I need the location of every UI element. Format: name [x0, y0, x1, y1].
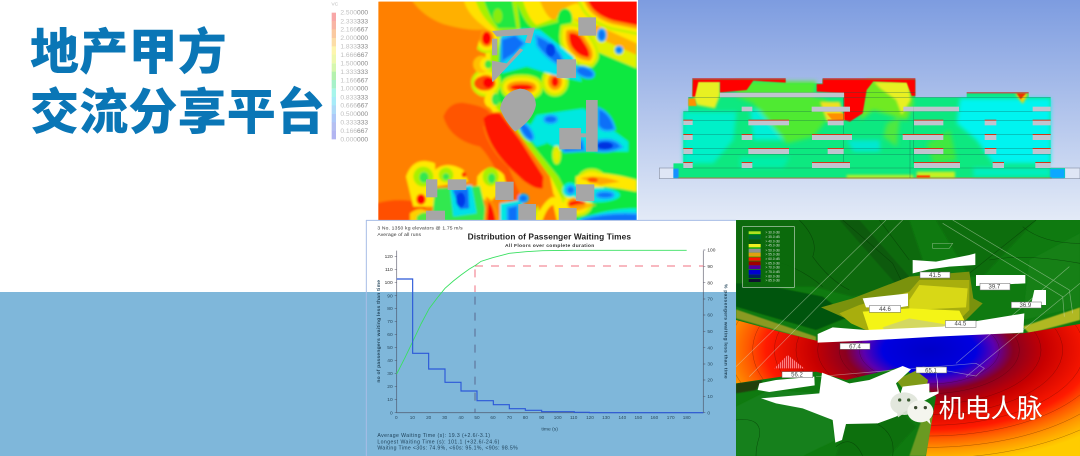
map legend: > 50.0 dB — [765, 248, 780, 252]
red hatched building — [774, 355, 804, 368]
noise value labels: 67.4 — [849, 344, 861, 350]
legend: velocity scale: 1.333333 — [340, 69, 368, 76]
map legend: > 40.0 dB — [765, 239, 780, 243]
terrain contour lines — [736, 220, 1080, 456]
right axis labels: 60 — [707, 313, 713, 319]
x axis labels: 10 — [410, 415, 415, 420]
legend: velocity scale: 0.500000 — [340, 111, 368, 118]
map legend: > 30.0 dB — [765, 231, 780, 235]
icon: wechat logo — [890, 392, 933, 425]
right axis labels: 50 — [707, 329, 713, 335]
section contour body — [659, 78, 1080, 179]
panel: building section heatmap — [659, 78, 1080, 179]
right axis labels: 40 — [707, 345, 713, 351]
chart frame — [366, 220, 736, 456]
upper warm wedge — [515, 0, 640, 47]
title — [30, 25, 325, 140]
noise value labels: 44.5 — [955, 322, 967, 328]
x axis labels: 140 — [618, 415, 627, 420]
map legend: > 85.0 dB — [765, 279, 780, 283]
map legend: > 35.0 dB — [765, 235, 780, 239]
x axis labels: 0 — [395, 415, 398, 420]
panel: wind velocity map — [331, 0, 640, 227]
left axis labels: 30 — [387, 371, 393, 377]
chart header text: Distribution of Passenger Waiting Times — [468, 231, 631, 241]
legend: velocity scale: 0.000000 — [340, 136, 368, 143]
map legend: > 60.0 dB — [765, 257, 780, 261]
left axis labels: 10 — [387, 397, 393, 403]
cumulative curve — [397, 250, 687, 374]
cold spots — [498, 26, 637, 220]
summary statistics: Longest Waiting Time (s): 101.1 (+32.6/-24.6) — [377, 439, 500, 445]
x axis labels: 100 — [554, 415, 562, 420]
summary statistics: Average Waiting Time (s): 19.3 (+2.6/-3.1) — [377, 433, 490, 439]
noise value labels: 44.6 — [879, 307, 891, 313]
watermark text: 机电人脉 — [939, 394, 1043, 424]
left axis labels: 80 — [387, 306, 393, 312]
axis titles: no of passengers waiting less than time — [376, 280, 382, 383]
noise value labels: 56.2 — [791, 373, 803, 379]
right flow field — [484, 52, 563, 202]
x axis labels: 30 — [442, 415, 448, 420]
left side repaint — [378, 2, 510, 220]
title: 交流分享平台 — [30, 85, 325, 140]
left axis labels: 60 — [387, 332, 393, 338]
noise value labels: 36.9 — [1020, 303, 1032, 309]
x axis labels: 170 — [667, 415, 675, 420]
x axis labels: 150 — [634, 415, 643, 420]
left axis labels: 40 — [387, 358, 393, 364]
left side spots — [482, 32, 491, 45]
blue band background — [0, 292, 740, 456]
bottom left rings — [406, 161, 437, 207]
axis titles — [376, 280, 729, 432]
x axis labels: 60 — [490, 415, 496, 420]
left axis labels — [385, 254, 393, 416]
x axis labels: 70 — [507, 415, 512, 420]
x axis labels: 50 — [474, 415, 480, 420]
map legend: > 45.0 dB — [765, 244, 780, 248]
title: 地产甲方 — [30, 25, 227, 80]
left axis labels: 50 — [387, 345, 393, 351]
base terrain green — [736, 220, 1080, 456]
right axis labels: 90 — [707, 264, 713, 270]
road linework — [736, 220, 1080, 377]
right axis labels: 30 — [707, 362, 713, 368]
map legend: > 75.0 dB — [765, 270, 780, 274]
right axis labels: 10 — [707, 394, 713, 400]
chart header text: Average of all runs — [377, 232, 421, 238]
map legend: > 65.0 dB — [765, 261, 780, 265]
x axis labels: 110 — [570, 415, 578, 420]
noise value labels — [782, 272, 1041, 379]
x axis labels: 130 — [602, 415, 610, 420]
map legend: > 80.0 dB — [765, 274, 780, 278]
road edge bands — [736, 307, 1080, 456]
x axis labels: 180 — [683, 415, 691, 420]
right axis labels: 20 — [707, 378, 713, 384]
chart background — [366, 220, 736, 292]
waiting time histogram steps — [397, 279, 703, 413]
legend: velocity scale: 2.166667 — [340, 27, 368, 34]
chart header text — [377, 226, 631, 249]
x axis labels — [395, 415, 691, 420]
legend: velocity scale: 2.500000 — [340, 10, 368, 17]
right axis labels: 0 — [707, 410, 710, 416]
chart header text: 3 No. 1350 kg elevators @ 1.75 m/s — [377, 226, 463, 232]
white building footprints — [758, 253, 1046, 443]
left axis labels: 90 — [387, 293, 393, 299]
central noise contours — [736, 320, 1080, 456]
legend: velocity scale — [331, 2, 368, 143]
chart header text: All Floors over complete duration — [505, 243, 594, 249]
legend: velocity scale: 0.833333 — [340, 94, 368, 101]
right axis labels — [707, 248, 716, 416]
legend: velocity scale: 1.000000 — [340, 86, 368, 93]
x axis labels: 90 — [539, 415, 545, 420]
noise value labels: 41.5 — [929, 273, 941, 279]
bottom warm streaks — [576, 173, 637, 192]
axis titles: % passengers waiting less than time — [723, 284, 729, 379]
target dashed line: 90 percent — [475, 266, 703, 413]
legend: velocity scale: 0.166667 — [340, 128, 368, 135]
legend: velocity scale: VC — [331, 2, 339, 8]
right axis labels: 100 — [707, 248, 716, 254]
legend: velocity scale: 2.333333 — [340, 18, 368, 25]
axis titles: time (s) — [541, 426, 558, 432]
panel: passenger waiting time chart — [366, 220, 736, 456]
x axis labels: 40 — [458, 415, 464, 420]
legend: velocity scale: 0.333333 — [340, 120, 368, 127]
left axis labels: 100 — [385, 280, 393, 286]
left axis labels: 120 — [385, 254, 393, 260]
floor slabs and openings — [683, 93, 1051, 178]
chart axes and ticks — [395, 250, 705, 413]
heatmap contours — [377, 0, 640, 227]
summary statistics — [377, 433, 518, 452]
legend: velocity scale: 0.666667 — [340, 103, 368, 110]
cold flow band — [502, 28, 582, 82]
panel: sky background for building section — [638, 0, 1080, 222]
x axis labels: 160 — [650, 415, 659, 420]
x axis labels: 20 — [426, 415, 432, 420]
noise value labels: 65.1 — [925, 368, 937, 374]
x axis labels: 80 — [523, 415, 528, 420]
right axis labels: 80 — [707, 280, 713, 286]
map legend: > 70.0 dB — [765, 266, 780, 270]
panel: noise contour site map — [706, 220, 1080, 456]
map legend — [743, 227, 794, 287]
right axis labels: 70 — [707, 297, 713, 303]
quiet side yellow contours — [821, 272, 983, 390]
left axis labels: 0 — [390, 410, 393, 416]
legend: velocity scale: 1.833333 — [340, 44, 368, 51]
legend: velocity scale: 1.166667 — [340, 77, 368, 84]
left axis labels: 110 — [385, 267, 393, 273]
summary statistics: Waiting Time <30s: 74.9%, <60s: 95.1%, <90s: 98.5% — [377, 446, 518, 452]
map legend: > 55.0 dB — [765, 253, 780, 257]
legend: velocity scale: 1.666667 — [340, 52, 368, 59]
left axis labels: 20 — [387, 384, 393, 390]
grey building footprints — [426, 17, 598, 224]
left axis labels: 70 — [387, 319, 393, 325]
diagonal red band — [483, 112, 553, 213]
legend: velocity scale: 1.500000 — [340, 60, 368, 67]
warm spots with halos — [470, 2, 637, 220]
noise value labels: 39.7 — [989, 285, 1001, 291]
legend: velocity scale: 2.000000 — [340, 35, 368, 42]
x axis labels: 120 — [586, 415, 594, 420]
